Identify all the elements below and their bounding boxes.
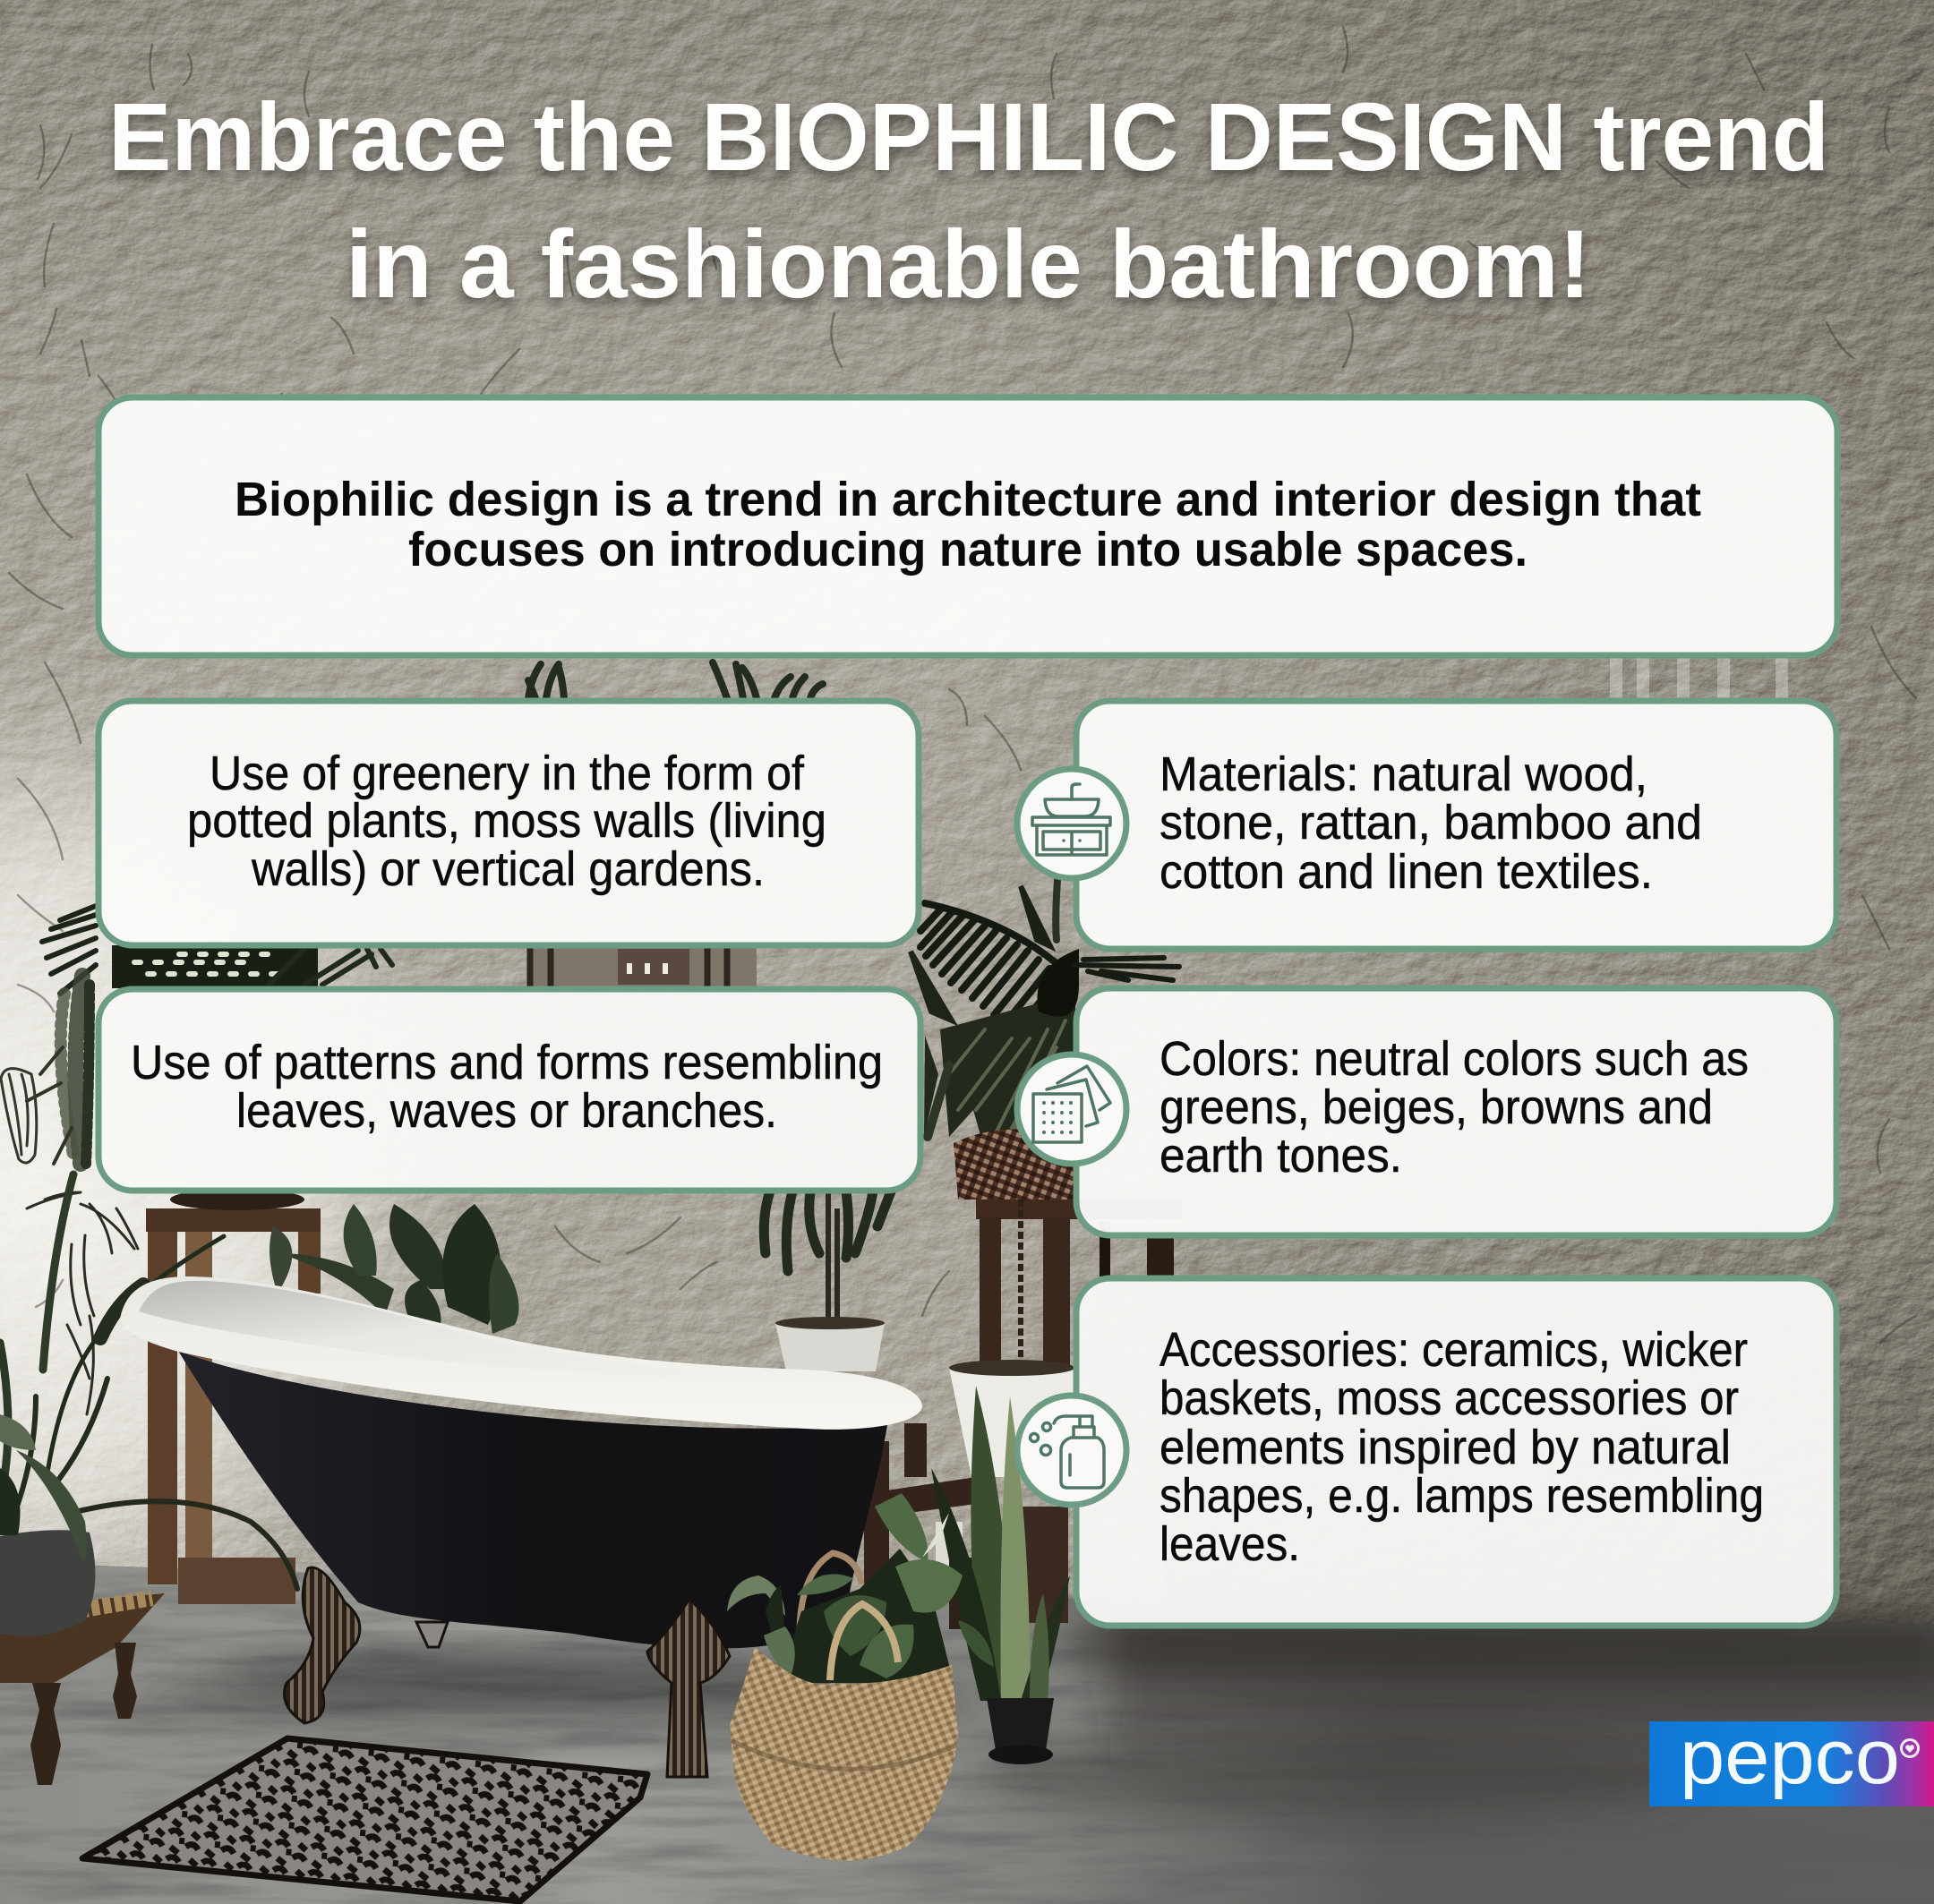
title [108, 82, 1829, 318]
materials text: Materials: natural wood, [1160, 747, 1647, 801]
greenery text: Use of greenery in the form of [210, 747, 805, 800]
bathtub claw feet [285, 1567, 730, 1777]
greenery text: potted plants, moss walls (living [187, 794, 826, 848]
pepco logo: pepco [1680, 1714, 1900, 1800]
lower frond mass [940, 994, 1079, 1173]
spiky leaves [911, 952, 952, 1020]
tub inner bowl [139, 1281, 806, 1379]
hanging cord [1018, 1200, 1023, 1370]
panel: accessories [1076, 1278, 1836, 1626]
plant tops above the left panel [528, 662, 823, 698]
right tip [1074, 958, 1179, 980]
right palm plant [911, 880, 1179, 1173]
accessories text: baskets, moss accessories or [1160, 1371, 1739, 1425]
colors text [1160, 1032, 1749, 1183]
tub rim [120, 1276, 922, 1430]
greenery text: walls) or vertical gardens. [251, 842, 765, 896]
pepco logo [1649, 1714, 1934, 1806]
accessories text [1160, 1323, 1764, 1571]
colors text: earth tones. [1160, 1129, 1402, 1183]
plant in the basket [727, 1493, 994, 1683]
intro text: Biophilic design is a trend in architecture and interior design that [235, 473, 1701, 526]
accessories text: Accessories: ceramics, wicker [1160, 1323, 1748, 1377]
wicker hanging basket [954, 1129, 1074, 1200]
title: Embrace the BIOPHILIC DESIGN trend [108, 82, 1829, 191]
icon: soap dispenser [1017, 1396, 1126, 1505]
panel: colors [1076, 988, 1836, 1235]
snake plant and black pot [931, 1386, 1070, 1764]
panel: greenery [98, 701, 919, 945]
panel: materials [1076, 701, 1836, 949]
patterns text: leaves, waves or branches. [236, 1084, 777, 1138]
accessories text: elements inspired by natural [1160, 1421, 1731, 1474]
patterns text [131, 1036, 883, 1138]
wooden stand on the right [976, 1200, 1182, 1370]
upper frond leaflets [920, 908, 1070, 1037]
colors text: greens, beiges, browns and [1160, 1080, 1713, 1134]
woven basket [730, 1604, 958, 1861]
window ghost between left panels [528, 947, 757, 986]
logo heart mark [1902, 1740, 1918, 1756]
panel: intro definition [98, 397, 1837, 655]
materials text [1160, 747, 1702, 899]
accessories text: shapes, e.g. lamps resembling [1160, 1469, 1764, 1523]
dark core [1037, 949, 1079, 1017]
icon: colour swatches [1017, 1054, 1126, 1164]
title: in a fashionable bathroom! [346, 209, 1591, 318]
materials text: cotton and linen textiles. [1160, 845, 1653, 899]
left palm plant [1, 906, 392, 1414]
intro text [235, 473, 1701, 576]
tall plant in white pot [764, 1191, 891, 1371]
left plant with long blades [0, 1174, 297, 1589]
greenery text [187, 747, 826, 896]
left stool and pot [0, 1414, 165, 1785]
accessories text: leaves. [1160, 1517, 1300, 1571]
panel: patterns [98, 989, 920, 1191]
small table behind the plants [864, 1423, 1068, 1629]
wooden stand behind the tub [146, 1189, 321, 1604]
bathtub [120, 1276, 922, 1648]
materials text: stone, rattan, bamboo and [1160, 796, 1702, 850]
dark foliage band between left panels [112, 945, 392, 988]
tub shadow [206, 1649, 797, 1695]
leafy plant behind the tub [270, 1204, 519, 1334]
patterns text: Use of patterns and forms resembling [131, 1036, 883, 1089]
tub body [178, 1351, 887, 1648]
colors text: Colors: neutral colors such as [1160, 1032, 1749, 1086]
floor [0, 1562, 1934, 1904]
intro text: focuses on introducing nature into usable spaces. [408, 523, 1528, 576]
curtain on the right [1616, 656, 1782, 699]
rug [82, 1738, 647, 1901]
white pot on the right [949, 1360, 1074, 1477]
icon: vanity sink [1017, 769, 1126, 878]
